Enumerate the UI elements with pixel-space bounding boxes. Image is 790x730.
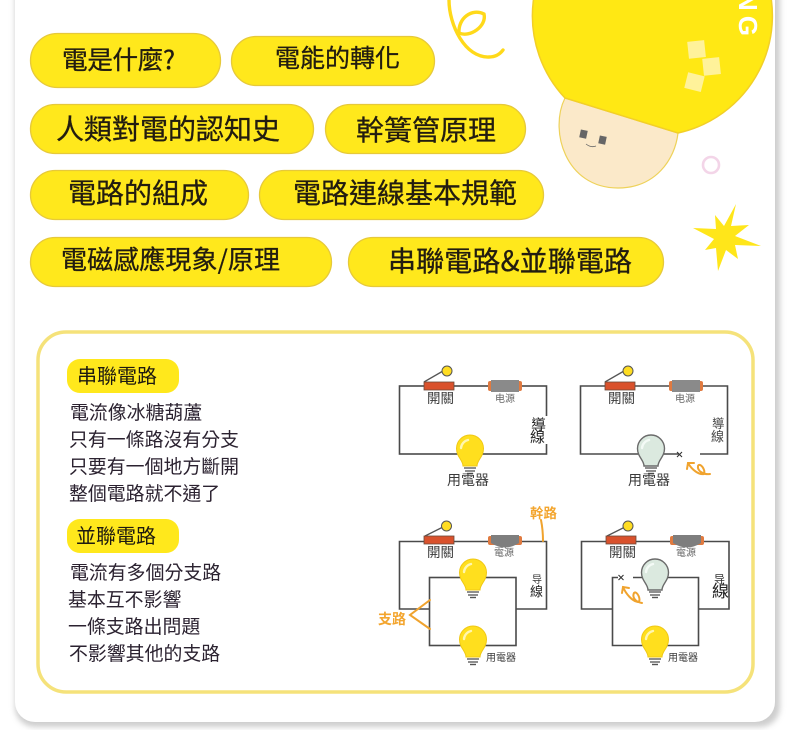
parallel description: 一條支路出問題: [68, 616, 200, 638]
pill: series and parallel circuits: [348, 238, 664, 286]
diagram: series closed circuit: 導: [531, 417, 546, 434]
arrow: branch break: [623, 587, 642, 603]
label: branch: 支路: [378, 611, 406, 627]
diagram: series closed circuit: 电源: [495, 392, 515, 405]
pill: human understanding of electricity: [30, 104, 314, 154]
parallel description: 不影響其他的支路: [69, 643, 220, 665]
diagram: series closed circuit: [400, 366, 548, 488]
diagram: parallel closed circuit: 開關: [427, 545, 454, 560]
topic pills: [30, 34, 664, 286]
pill: reed tube principle: [326, 104, 526, 154]
heading: parallel circuit: 並聯電路: [76, 525, 156, 548]
parallel description: [68, 562, 221, 665]
pill: wiring standards: [260, 170, 544, 220]
face: [579, 129, 607, 147]
pill: reed tube principle: 幹簧管原理: [356, 109, 496, 149]
parallel description: 電流有多個分支路: [70, 562, 221, 584]
diagram: parallel broken circuit: 線: [712, 582, 729, 601]
diagram: parallel closed circuit: [378, 505, 558, 664]
arrow: break point: [688, 463, 710, 474]
pill: what is electricity: [30, 34, 220, 88]
diagram: series closed circuit: 線: [530, 429, 545, 446]
pill: electromagnetic induction: [30, 238, 332, 286]
series description: 只要有一個地方斷開: [69, 456, 239, 478]
diagram: parallel closed circuit: 電源: [494, 546, 514, 559]
diagram: parallel broken circuit: 電源: [676, 546, 696, 559]
heading: parallel circuit: [67, 519, 179, 553]
series description: 只有一條路沒有分支: [69, 429, 239, 451]
heading: series circuit: [67, 359, 179, 393]
diagram: series closed circuit: 開關: [427, 391, 454, 406]
pill: what is electricity: 電是什麼?: [62, 40, 175, 77]
pill: circuit components: 電路的組成: [68, 172, 208, 212]
pill: electromagnetic induction: 電磁感應現象/原理: [61, 240, 280, 277]
series circuit text: [67, 359, 239, 505]
diagram: series broken circuit: [580, 366, 728, 488]
pill: series and parallel circuits: 串聯電路&並聯電路: [388, 240, 632, 280]
parallel circuit text: [67, 519, 221, 665]
yellow star: [693, 204, 761, 271]
diagram: parallel closed circuit: 線: [530, 584, 543, 599]
label: trunk: [530, 505, 558, 541]
series description: 電流像冰糖葫蘆: [70, 402, 202, 424]
panel: circuits: [38, 332, 753, 692]
diagram: parallel broken circuit: 開關: [609, 545, 636, 560]
decorative squiggle: [449, 0, 503, 57]
diagram: parallel closed circuit: 导: [532, 574, 542, 586]
pill: electric energy conversion: 電能的轉化: [275, 39, 400, 75]
parallel description: 基本互不影響: [68, 589, 181, 611]
pill: human understanding of electricity: 人類對電的認知史: [56, 108, 280, 148]
diagram: series broken circuit: 电源: [675, 392, 695, 405]
pill: electric energy conversion: [232, 36, 434, 86]
diagram: series closed circuit: 用電器: [447, 472, 489, 488]
diagram: series broken circuit: 用電器: [628, 472, 670, 488]
bulb cap: [559, 98, 678, 188]
diagram: parallel broken circuit: 导: [714, 573, 725, 586]
diagram: parallel broken circuit: 用電器: [668, 652, 698, 664]
pill: wiring standards: 電路連線基本規範: [293, 172, 517, 212]
pink ring: [703, 157, 719, 173]
series description: [69, 402, 239, 505]
bulb head: [532, 0, 772, 133]
diagram: series broken circuit: 導: [712, 416, 725, 431]
heading: series circuit: 串聯電路: [77, 365, 157, 388]
pill: circuit components: [30, 170, 248, 220]
mascot lightbulb: [532, 0, 772, 188]
label: trunk: 幹路: [530, 505, 558, 521]
diagram: parallel broken circuit: [582, 521, 729, 664]
diagram: series broken circuit: 線: [711, 429, 724, 444]
pixel highlights: [684, 40, 721, 92]
label: branch: [378, 600, 430, 629]
series description: 整個電路就不通了: [69, 483, 220, 505]
diagram: parallel closed circuit: 用電器: [486, 652, 516, 664]
diagram: series broken circuit: 開關: [608, 391, 635, 406]
